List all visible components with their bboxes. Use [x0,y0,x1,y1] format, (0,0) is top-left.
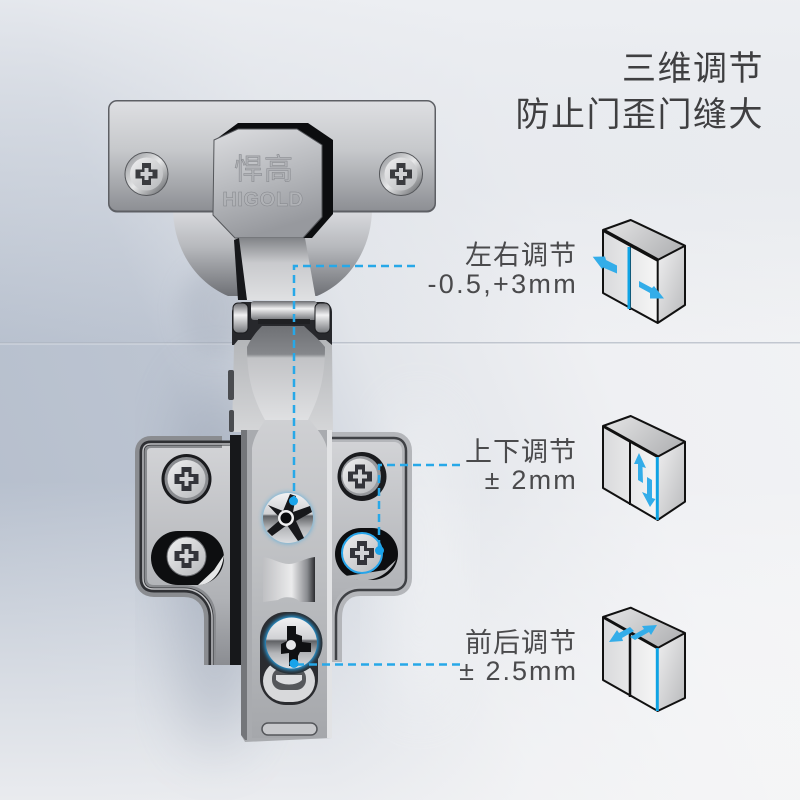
adjustment slot [260,612,318,705]
leader end dots [289,496,384,668]
logo: HIGOLD [222,189,304,211]
cam screw with blue glow [262,492,314,544]
label: front-back adjustment [459,628,578,686]
label: left-right adjustment [428,240,578,299]
icon: cabinet up-down [603,416,685,520]
main base strip with raised plate [228,370,332,742]
label: up-down adjustment [465,437,578,495]
label: left-right adjustment: 左右调节 [465,240,577,270]
hinge arm and knuckle [232,238,333,432]
label: up-down adjustment: ± 2mm [485,465,578,495]
label: front-back adjustment: ± 2.5mm [459,656,578,686]
hinge plate with logo dome [108,100,436,238]
icon: cabinet front-back [603,608,685,711]
hinge illustration [108,100,685,742]
label: left-right adjustment: -0.5,+3mm [428,269,578,299]
cup: half-round mounting cup [173,208,372,296]
logo: 悍高 [234,153,294,186]
icon: cabinet left-right [593,220,685,323]
window cut-out [263,557,315,602]
title [516,50,764,134]
base plate right wing [330,437,407,662]
logo [222,153,304,211]
plate screws [125,152,422,196]
subtitle: 防止门歪门缝大 [516,96,764,134]
label: front-back adjustment: 前后调节 [465,628,577,658]
title: 三维调节 [622,50,764,88]
label: up-down adjustment: 上下调节 [465,437,577,467]
large lower screw with blue glow [260,612,322,674]
blue dashed leader lines [294,266,460,664]
lower slit [262,723,317,735]
base plate left wing [141,442,232,665]
